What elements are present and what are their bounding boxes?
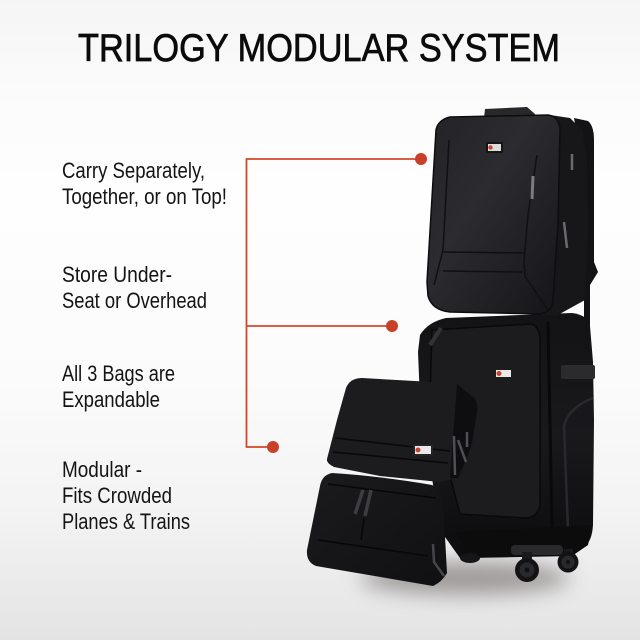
backpack pocket seam	[434, 140, 548, 310]
lower bag side zipper	[433, 544, 444, 576]
suitcase logo badge	[494, 368, 513, 379]
feature list	[62, 158, 227, 534]
suitcase side pocket	[564, 398, 593, 530]
backpack top handle	[484, 107, 535, 120]
backpack front	[427, 115, 560, 314]
title: TRILOGY MODULAR SYSTEM	[78, 27, 560, 70]
suitcase side handle	[561, 365, 595, 379]
backpack logo badge	[486, 142, 503, 153]
suitcase base	[456, 525, 592, 558]
upper bag side panel	[450, 384, 477, 478]
upper cube bag	[327, 378, 477, 482]
lower cube bag	[307, 473, 447, 586]
backpack	[427, 107, 598, 352]
upper bag zipper	[454, 432, 467, 475]
callout dot: backpack	[415, 153, 427, 165]
rear wheel	[460, 553, 480, 563]
lower bag zipper pulls	[355, 490, 371, 516]
feature: expandable, second line: Expandable	[62, 387, 160, 412]
feature: modular, third line: Planes & Trains	[62, 509, 190, 534]
suitcase	[418, 313, 595, 582]
backpack shoulder strap	[574, 118, 598, 352]
suitcase body	[418, 313, 594, 558]
callout dot: small bags	[267, 441, 279, 453]
feature: storage, second line: Seat or Overhead	[62, 288, 207, 313]
upper bag strap seams	[333, 438, 450, 463]
front wheel right	[558, 549, 578, 572]
feature: modular: Modular -	[62, 457, 142, 482]
ground shadow	[360, 561, 570, 595]
feature: storage: Store Under-	[62, 262, 172, 287]
front wheel left	[515, 552, 539, 582]
suitcase zip seam	[548, 322, 552, 528]
callout lines	[246, 153, 427, 453]
small bags	[307, 378, 477, 586]
backpack side zipper	[564, 154, 572, 248]
feature: expandable: All 3 Bags are	[62, 361, 175, 386]
callout connector	[246, 159, 421, 447]
callout dot: suitcase	[386, 320, 398, 332]
feature: carry options: Carry Separately,	[62, 158, 205, 183]
caster housing	[511, 545, 563, 555]
feature: carry options, second line: Together, or on Top!	[62, 184, 227, 209]
upper bag logo badge	[413, 444, 433, 456]
suitcase front panel	[430, 324, 540, 518]
feature: modular, second line: Fits Crowded	[62, 483, 172, 508]
lower bag pocket seams	[318, 484, 436, 556]
backpack side panel	[540, 115, 588, 316]
suitcase zipper pull	[430, 328, 441, 345]
backpack grey zip pull	[532, 176, 533, 199]
